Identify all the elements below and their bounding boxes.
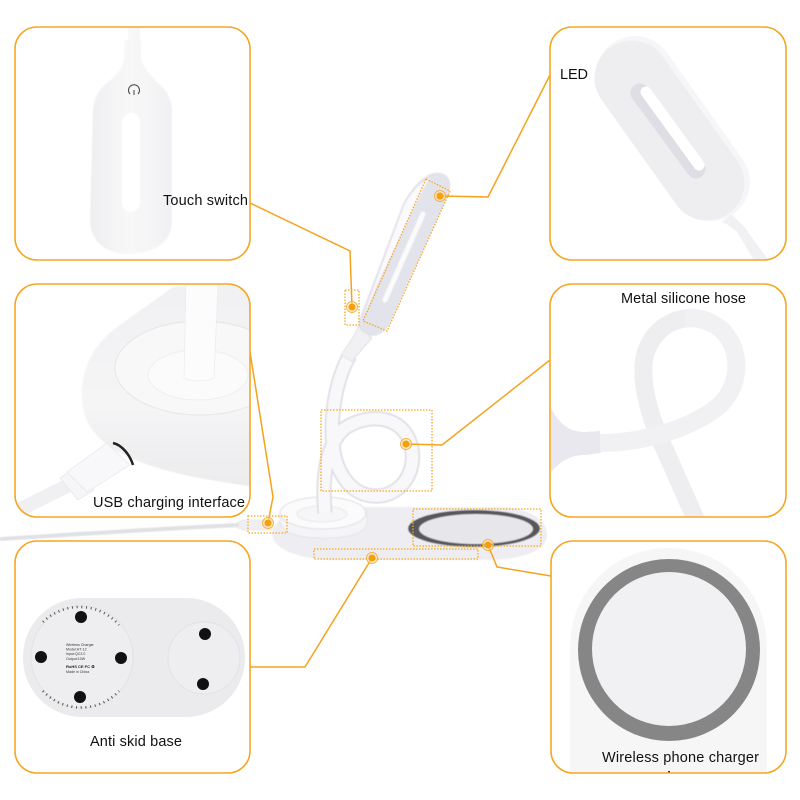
spec text: RoHS CE FC ♻ xyxy=(66,664,95,669)
small mark xyxy=(668,771,670,772)
pedestal top xyxy=(280,497,366,529)
charger pad xyxy=(592,572,746,726)
spec text: Output:10W xyxy=(66,657,86,661)
base top ring xyxy=(114,322,249,416)
icon: power xyxy=(128,85,140,95)
spec text: Model:HT-12 xyxy=(66,648,87,652)
pedestal inner ring xyxy=(297,506,347,522)
hose lower strand xyxy=(643,318,715,520)
leader line: anti skid base xyxy=(250,549,478,667)
lamp round pedestal xyxy=(280,513,367,538)
gooseneck hose xyxy=(324,355,413,513)
leader line: USB interface xyxy=(248,352,287,533)
leader line: wireless charger xyxy=(413,509,551,576)
spec text: Wireless Charger xyxy=(66,643,95,647)
flared base xyxy=(551,408,601,472)
central lamp xyxy=(0,173,547,560)
lamp charging cable xyxy=(0,525,240,539)
base body xyxy=(82,284,250,486)
lamp head back rim xyxy=(635,75,711,182)
inner disc xyxy=(148,350,248,400)
lamp neck collar xyxy=(341,326,372,361)
spec text: Made in China xyxy=(66,670,89,674)
label: LED: LED xyxy=(560,67,588,83)
lamp USB plug xyxy=(238,520,272,530)
wireless charger pad xyxy=(419,514,533,544)
lamp head xyxy=(359,173,450,335)
lamp base plate xyxy=(272,507,547,560)
LED face xyxy=(632,78,707,183)
USB collar xyxy=(60,473,94,500)
spec text: Input:QC3.0 xyxy=(66,652,85,656)
base underside xyxy=(23,598,245,717)
USB port xyxy=(113,443,133,465)
USB cable xyxy=(15,482,75,512)
hose upper strand xyxy=(600,318,736,443)
right disc xyxy=(168,622,240,694)
left disc xyxy=(31,606,133,708)
lamp head slot xyxy=(385,214,423,300)
panel: anti skid base xyxy=(15,541,250,773)
panel: metal silicone hose xyxy=(550,284,786,520)
charger body xyxy=(570,548,767,775)
wireless charger ring xyxy=(408,510,540,547)
leader line: LED xyxy=(363,75,550,331)
LED slot light xyxy=(646,92,699,165)
label: hose: Metal silicone hose xyxy=(621,291,746,307)
lamp head front view xyxy=(90,27,172,254)
label: USB: USB charging interface xyxy=(93,495,245,511)
leader line: touch switch xyxy=(250,203,359,325)
neck xyxy=(722,214,768,259)
vent ticks xyxy=(43,607,119,708)
label: charger: Wireless phone charger xyxy=(602,750,759,766)
lamp head bright rim xyxy=(364,178,430,314)
LED slot xyxy=(640,93,696,169)
USB plug xyxy=(67,443,130,492)
panel: LED xyxy=(550,27,786,262)
slot xyxy=(122,113,140,212)
panel: touch switch xyxy=(15,27,250,260)
label: touch switch: Touch switch xyxy=(163,193,248,209)
panel: USB charging interface xyxy=(14,283,251,518)
rubber feet xyxy=(35,611,211,703)
charger ring xyxy=(578,559,760,741)
pole xyxy=(184,284,218,381)
spec text xyxy=(66,643,95,674)
label: anti skid base: Anti skid base xyxy=(90,734,182,750)
leader line: hose xyxy=(321,360,550,491)
panel: wireless phone charger xyxy=(551,541,786,775)
